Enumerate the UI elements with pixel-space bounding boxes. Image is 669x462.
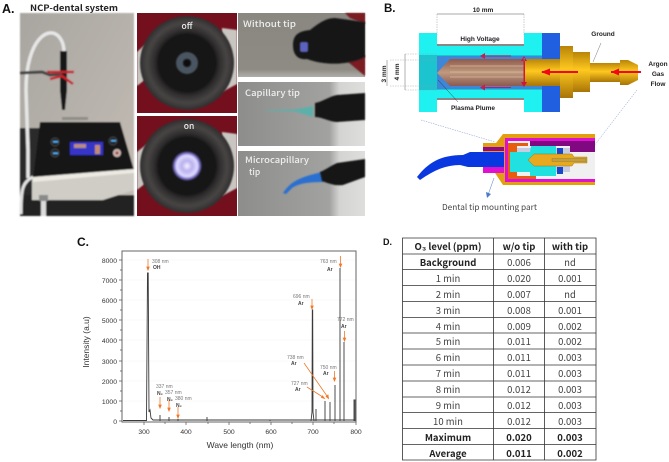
panel label: B: B.: [384, 3, 396, 15]
photo: plasma on: [137, 116, 237, 216]
table summary rows: [425, 430, 583, 460]
table body: 0.007: [507, 287, 531, 301]
dimension: 3 mm and 4 mm: [381, 54, 437, 90]
table body: 0.009: [507, 319, 531, 333]
table body: 6 min: [436, 350, 460, 364]
photo: NCP-dental system device: [20, 13, 134, 216]
table body: 0.003: [558, 398, 582, 412]
x axis labels: [138, 429, 362, 436]
peak labels: N₂: [157, 391, 163, 397]
photo: without tip: Without tip: [243, 18, 296, 30]
table summary rows: 0.002: [557, 446, 583, 460]
table body: 0.003: [558, 350, 582, 364]
label: Dental tip mounting part: Dental tip mounting part: [442, 202, 537, 213]
label: Argon Gas Flow: Argon: [648, 61, 668, 68]
photo: microcapillary tip: tip: [249, 166, 260, 178]
peak labels: 763 nm: [320, 259, 337, 265]
y axis labels: 5000: [102, 318, 117, 325]
table body: nd: [564, 255, 576, 269]
table grid: [402, 238, 596, 460]
peak labels: Ar: [341, 324, 347, 330]
peak labels: 772 nm: [337, 317, 354, 323]
photo: microcapillary tip: [238, 151, 365, 216]
label: Argon Gas Flow: Flow: [651, 81, 666, 88]
y axis labels: 8000: [102, 258, 117, 265]
panel label: C: C.: [77, 235, 89, 249]
table body: 0.002: [558, 319, 582, 333]
peak labels: 750 nm: [320, 365, 337, 371]
table body: 0.002: [558, 334, 582, 348]
red flow arrows: [480, 53, 641, 90]
photo: capillary tip: [238, 82, 365, 146]
x axis title: Wave length (nm): [207, 440, 274, 450]
table body: 0.008: [507, 303, 531, 317]
label: Argon Gas Flow: Gas: [652, 71, 665, 78]
table body: 1 min: [436, 271, 460, 285]
table body: 0.012: [507, 414, 531, 428]
peak labels: Ar: [295, 387, 301, 393]
table body: 5 min: [436, 334, 460, 348]
peak labels: 380 nm: [175, 396, 192, 402]
table body: [420, 255, 582, 428]
dimension: 3 mm and 4 mm: 4 mm: [394, 63, 401, 80]
table body: 0.011: [507, 366, 531, 380]
peak labels: Ar: [327, 267, 333, 273]
peak labels: N₂: [167, 397, 173, 403]
table body: 7 min: [436, 366, 460, 380]
panel label: A: A.: [2, 2, 14, 16]
spectrum line: [123, 268, 356, 421]
table body: 0.011: [507, 350, 531, 364]
table body: 8 min: [436, 382, 460, 396]
y axis labels: 4000: [102, 338, 117, 345]
peak labels: Ar: [323, 371, 329, 377]
peak labels: 337 nm: [156, 384, 173, 390]
y axis labels: 3000: [102, 359, 117, 366]
x axis ticks: [144, 422, 356, 425]
table body: 4 min: [436, 319, 460, 333]
x axis labels: 400: [180, 429, 192, 436]
table header: [415, 239, 588, 253]
table body: 0.020: [507, 271, 531, 285]
peak labels: Ar: [298, 301, 304, 307]
table body: 0.011: [507, 334, 531, 348]
table body: Background: [420, 255, 476, 269]
table body: 0.003: [558, 414, 582, 428]
peak labels: 727 nm: [291, 381, 308, 387]
label: Plasma Plume: [438, 80, 495, 112]
y axis labels: 6000: [102, 298, 117, 305]
peak arrows: [147, 256, 346, 418]
table header: O₃ level (ppm): [415, 239, 481, 253]
heading: NCP-dental system: NCP-dental system: [30, 2, 118, 14]
table body: 3 min: [436, 303, 460, 317]
dimension: 3 mm and 4 mm: 3 mm: [381, 65, 388, 82]
peak labels: OH: [153, 265, 161, 271]
table body: 0.003: [558, 366, 582, 380]
photo: capillary tip: Capillary tip: [245, 87, 300, 99]
peak labels: 308 nm: [152, 259, 169, 265]
table summary rows: 0.011: [506, 446, 532, 460]
y axis ticks: [119, 260, 122, 421]
label: Ground: [591, 31, 615, 62]
label: off: off: [182, 20, 194, 32]
plot frame: [122, 251, 356, 422]
table summary rows: 0.020: [506, 430, 532, 444]
peak labels: [152, 259, 354, 409]
table summary rows: Maximum: [425, 430, 471, 444]
table header: w/o tip: [503, 239, 535, 253]
table body: 0.001: [558, 271, 582, 285]
table: ozone levels: [402, 238, 596, 460]
diagram: plasma jet cross-section: [419, 33, 638, 112]
x axis labels: 300: [138, 429, 150, 436]
photo: microcapillary tip: Microcapillary: [245, 154, 309, 166]
table body: nd: [564, 287, 576, 301]
table summary rows: Average: [428, 446, 467, 460]
dimension: 10 mm: 10 mm: [473, 7, 494, 14]
peak labels: 357 nm: [165, 390, 182, 396]
y axis title: Intensity (a.u): [81, 316, 91, 368]
x axis labels: 700: [307, 429, 319, 436]
chart: emission spectrum: [81, 251, 362, 450]
y axis labels: 2000: [102, 379, 117, 386]
table body: 0.003: [558, 382, 582, 396]
photo: without tip: [238, 13, 365, 77]
x axis labels: 800: [350, 429, 362, 436]
label: Dental tip mounting part: [442, 178, 537, 213]
table body: 2 min: [436, 287, 460, 301]
label: Plasma Plume: Plasma Plume: [451, 105, 495, 112]
table header: with tip: [552, 239, 588, 253]
table body: 0.012: [507, 382, 531, 396]
table body: 0.001: [558, 303, 582, 317]
x axis labels: 600: [265, 429, 277, 436]
label: Ground: Ground: [591, 31, 615, 38]
label: on: on: [184, 120, 194, 132]
y axis labels: 1000: [102, 399, 117, 406]
dimension: 10 mm: [437, 7, 524, 35]
y axis labels: 0: [113, 419, 117, 426]
label: High Voltage: High Voltage: [460, 36, 500, 43]
table body: 9 min: [436, 398, 460, 412]
panel label: D: D.: [383, 237, 392, 247]
x axis labels: 500: [223, 429, 235, 436]
table body: 0.006: [507, 255, 531, 269]
y axis labels: [102, 258, 117, 426]
table body: 10 min: [433, 414, 463, 428]
photo: plasma off: [137, 13, 237, 113]
peak labels: N₂: [176, 403, 182, 409]
table summary rows: 0.003: [557, 430, 583, 444]
peak labels: 738 nm: [287, 355, 304, 361]
y axis labels: 7000: [102, 278, 117, 285]
diagram: handpiece cross-section: [417, 134, 595, 185]
peak labels: 696 nm: [293, 294, 310, 300]
zoom guide lines: [421, 90, 637, 146]
table body: 0.012: [507, 398, 531, 412]
peak labels: Ar: [291, 361, 297, 367]
